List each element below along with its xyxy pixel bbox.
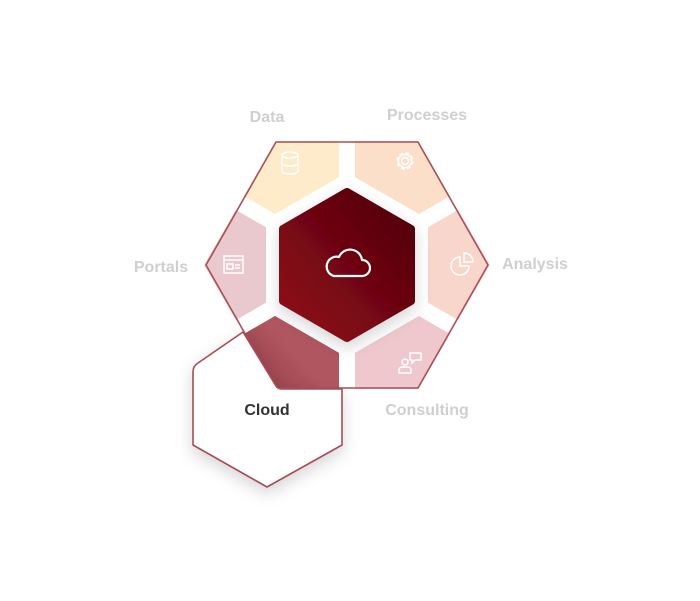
segment: analysis <box>428 210 490 320</box>
segment: portals <box>204 210 266 320</box>
icon: pie <box>451 253 473 275</box>
icon: consulting <box>399 353 421 373</box>
labels: Analysis <box>502 256 568 273</box>
segment: consulting <box>355 316 450 389</box>
segment: cloud <box>246 316 339 388</box>
labels: Consulting <box>385 402 469 419</box>
center hexagon <box>283 192 411 338</box>
icon: gear <box>397 153 413 169</box>
cloud card: Cloud <box>244 402 290 419</box>
segment: processes <box>355 141 450 214</box>
icon: cloud center <box>327 250 370 276</box>
icon: portal <box>224 256 243 273</box>
labels: Portals <box>134 259 188 276</box>
labels <box>134 107 568 419</box>
icon: database <box>282 152 298 174</box>
segment: data <box>224 141 339 230</box>
infographic <box>135 109 568 498</box>
outer outline <box>206 142 488 388</box>
ring of segments <box>204 141 490 389</box>
labels: Processes <box>387 107 467 124</box>
cloud card <box>193 332 342 487</box>
labels: Data <box>250 109 284 126</box>
